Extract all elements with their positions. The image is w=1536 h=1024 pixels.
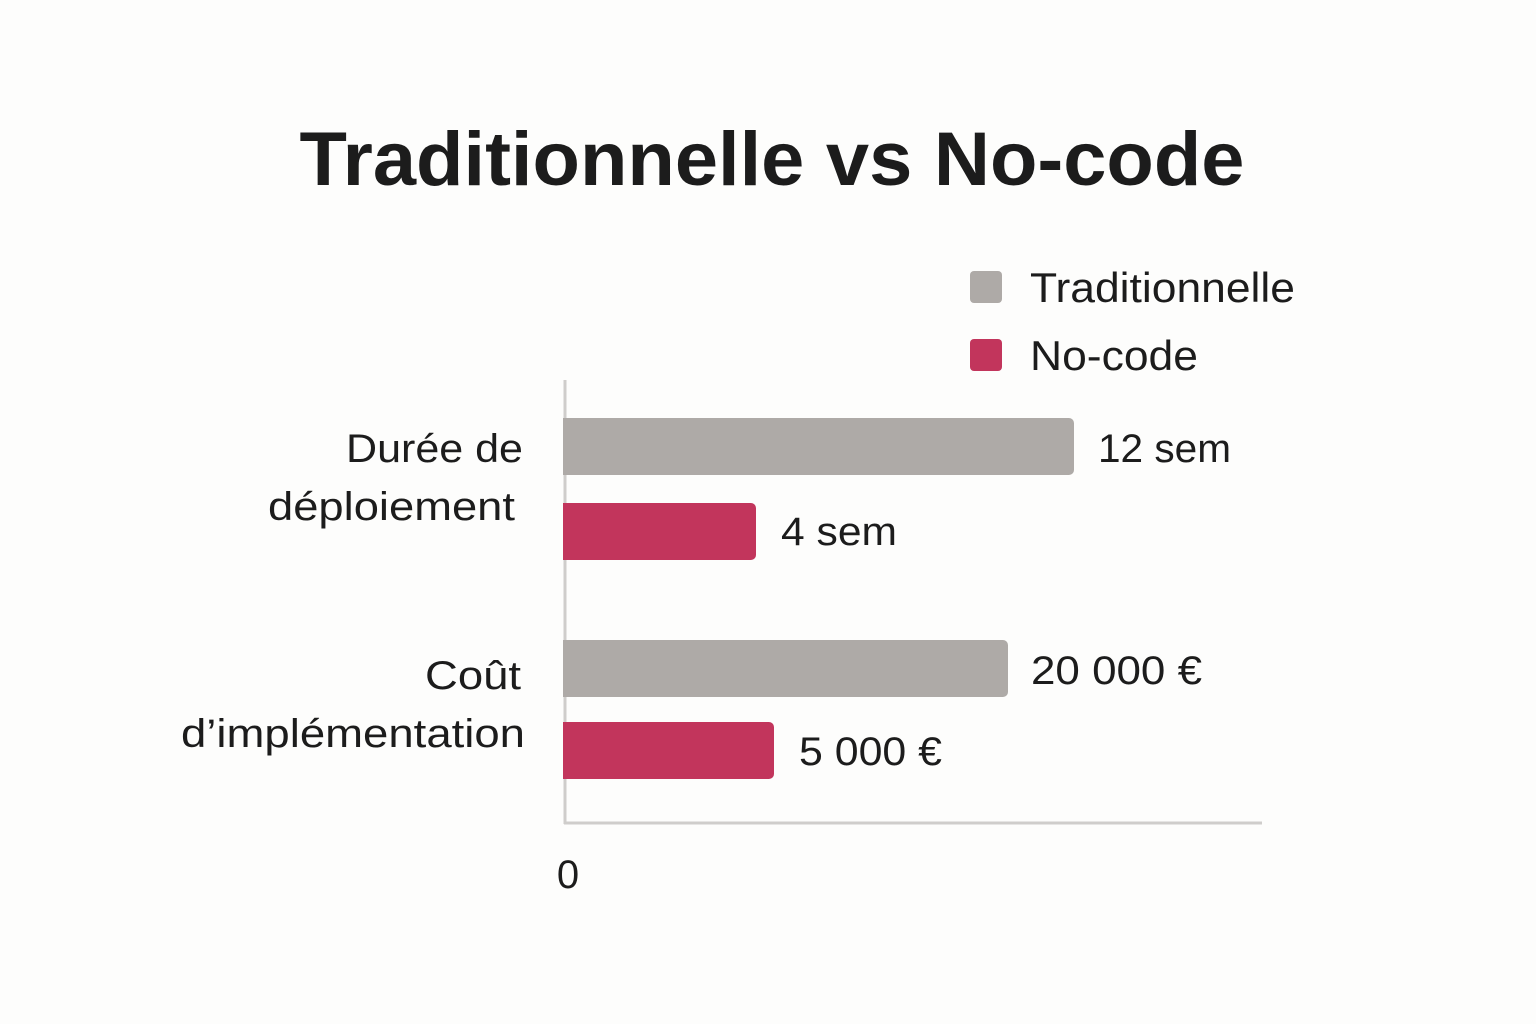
category label: Coût d'implémentation: [181, 654, 525, 756]
legend item: No-code: [970, 332, 1198, 379]
title: Traditionnelle vs No-code: [300, 117, 1244, 202]
category label: Durée de déploiement: Durée de: [346, 427, 523, 471]
legend item: Traditionnelle: Traditionnelle: [1030, 264, 1295, 311]
legend item: No-code: No-code: [1030, 332, 1198, 379]
category label: Coût d'implémentation: Coût: [425, 654, 521, 698]
bar: durée no-code: [563, 503, 897, 560]
bar: coût no-code: [563, 722, 942, 779]
category label: Coût d'implémentation: d’implémentation: [181, 712, 525, 756]
bar: durée traditionnelle: 12 sem: [1098, 427, 1231, 471]
bar: durée no-code: 4 sem: [781, 510, 897, 554]
bar: coût traditionnelle: 20 000 €: [1031, 649, 1202, 693]
bar: durée traditionnelle: [563, 418, 1231, 475]
bar: coût traditionnelle: [563, 640, 1202, 697]
category label: Durée de déploiement: [268, 427, 523, 529]
axes: [564, 380, 1262, 824]
legend: [970, 264, 1295, 379]
bar: coût no-code: 5 000 €: [799, 730, 942, 774]
axis tick label 0: 0: [557, 853, 579, 897]
category label: Durée de déploiement: déploiement: [268, 485, 515, 529]
